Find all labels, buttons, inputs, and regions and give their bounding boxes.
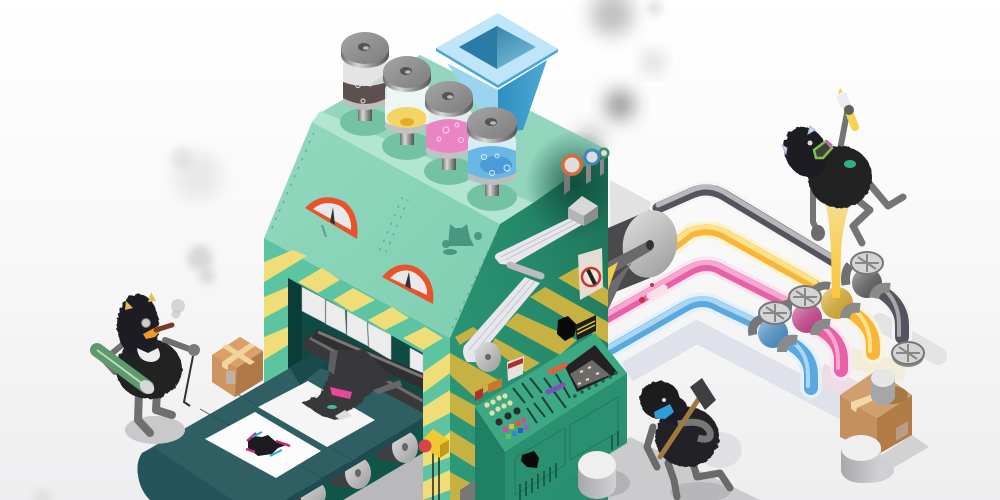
machine	[264, 55, 625, 500]
monster horns	[782, 126, 815, 154]
valve: yellow	[815, 286, 860, 319]
monster: drinking paint	[776, 88, 903, 243]
funnel: inner	[459, 26, 536, 69]
jar: brown	[340, 32, 390, 136]
paper sheets in press	[302, 287, 423, 380]
machine: hood slope	[264, 122, 500, 338]
panel: hole	[521, 451, 539, 468]
monster: with hammer	[640, 378, 730, 500]
bottom lever	[460, 478, 510, 500]
hole in wall	[557, 316, 577, 341]
panel: top	[475, 333, 627, 452]
control panel	[475, 333, 627, 500]
labels: small warning stickers	[475, 356, 524, 401]
monster body	[116, 294, 182, 399]
panel: purple lever	[548, 385, 563, 392]
monster mouth	[654, 404, 674, 419]
panel: doors	[515, 397, 618, 495]
panel: coloured buttons	[503, 418, 529, 439]
panel: LEDs	[484, 393, 513, 416]
pipe: yellow	[668, 227, 815, 285]
loose valve wheel	[892, 342, 924, 367]
monster body	[640, 381, 719, 467]
monster: left with cigar	[97, 292, 200, 444]
gauge: lower	[382, 265, 433, 304]
down pipes	[783, 291, 902, 388]
gauge: upper	[305, 197, 358, 239]
belt: box	[568, 196, 598, 226]
pipe: blue	[606, 298, 752, 352]
floor shadows	[547, 180, 938, 500]
paper: printed sheet	[205, 412, 321, 478]
bottle	[836, 88, 855, 127]
small gauges	[561, 148, 610, 195]
stripes: right wall	[450, 267, 608, 500]
stain: monster silhouette on hood	[442, 224, 482, 255]
belt: lower	[463, 277, 540, 362]
pipe: pink	[606, 262, 785, 318]
machine: front lower wall	[264, 238, 450, 500]
hammer	[660, 378, 716, 457]
upper press roller	[312, 329, 423, 389]
panel: left face	[475, 407, 505, 500]
monster scroll	[97, 350, 157, 397]
valve: pink	[786, 286, 830, 335]
panel: knobs	[495, 407, 521, 426]
paper: sheet under press	[258, 381, 375, 447]
valve: blue	[752, 302, 797, 352]
opening	[288, 278, 423, 500]
monster legs	[647, 427, 730, 497]
paint splat on body	[844, 160, 856, 168]
monster legs	[104, 340, 192, 433]
rivets	[272, 130, 497, 328]
lower press roller	[303, 334, 423, 413]
jar: blue	[467, 107, 517, 211]
conveyor: belt	[138, 362, 423, 500]
yellow paint stream	[826, 205, 849, 298]
panel: vents	[520, 431, 618, 500]
panel: sliders	[513, 374, 570, 423]
warning sign	[578, 248, 603, 300]
monster bib	[137, 348, 160, 362]
smoke from cigar	[171, 299, 185, 318]
belt: upper	[495, 213, 585, 265]
funnel: left side	[447, 63, 498, 133]
valve: grey	[846, 252, 890, 298]
cardboard box: right	[840, 369, 912, 455]
panel: right face	[505, 373, 627, 500]
cylinder on box	[871, 369, 908, 405]
monster beak	[143, 326, 165, 339]
printed monster	[246, 432, 290, 456]
conveyor: inner floor	[290, 345, 340, 385]
pipe: grey	[658, 187, 835, 262]
pulley	[608, 205, 683, 310]
belt: link arm	[510, 265, 541, 276]
label: yellow caution	[575, 315, 596, 340]
smoke stain on right wall	[528, 132, 608, 230]
monster cane	[184, 356, 193, 406]
monster horns	[125, 292, 156, 310]
stripes: left column and lintel	[264, 250, 443, 360]
white cylinder by panel	[578, 451, 630, 499]
monster eye	[808, 140, 812, 146]
conveyor: rollers	[295, 431, 418, 500]
conveyor: near edge	[285, 418, 423, 500]
panel: screen	[565, 345, 618, 392]
jars	[340, 32, 517, 211]
machine: right wall	[450, 150, 608, 500]
monster mouth	[814, 141, 832, 158]
funnel	[436, 13, 558, 133]
valves	[752, 205, 924, 367]
jar: pink	[424, 81, 474, 185]
machine: top surface	[320, 55, 608, 203]
conveyor	[138, 329, 423, 500]
panel: screen dials	[573, 371, 618, 398]
funnel: rim	[436, 13, 558, 85]
conveyor: roller bay	[287, 418, 423, 500]
panel: red lever	[550, 365, 565, 372]
conveyor: curved end	[138, 448, 233, 500]
monster shadow	[670, 482, 730, 500]
emergency button	[418, 429, 449, 500]
jar: yellow	[382, 56, 432, 160]
monster: flattened in press	[302, 350, 402, 420]
machine: top ledge	[312, 111, 533, 224]
monster shadow	[125, 416, 185, 444]
monster body	[776, 120, 872, 208]
smoke clouds	[33, 0, 663, 500]
belt: pulley	[475, 342, 501, 372]
monster eye	[142, 318, 150, 328]
cardboard box: left	[212, 337, 263, 397]
monster feet	[811, 225, 825, 241]
belt mechanism	[463, 196, 598, 372]
stripes: front column	[423, 353, 450, 500]
cigar	[156, 325, 172, 330]
conveyor: floor under rollers	[343, 450, 423, 500]
pipes	[606, 187, 835, 352]
monster arm	[678, 422, 710, 439]
monster limbs	[813, 113, 903, 243]
funnel: right side	[498, 60, 547, 133]
white cylinder: right	[841, 435, 894, 483]
